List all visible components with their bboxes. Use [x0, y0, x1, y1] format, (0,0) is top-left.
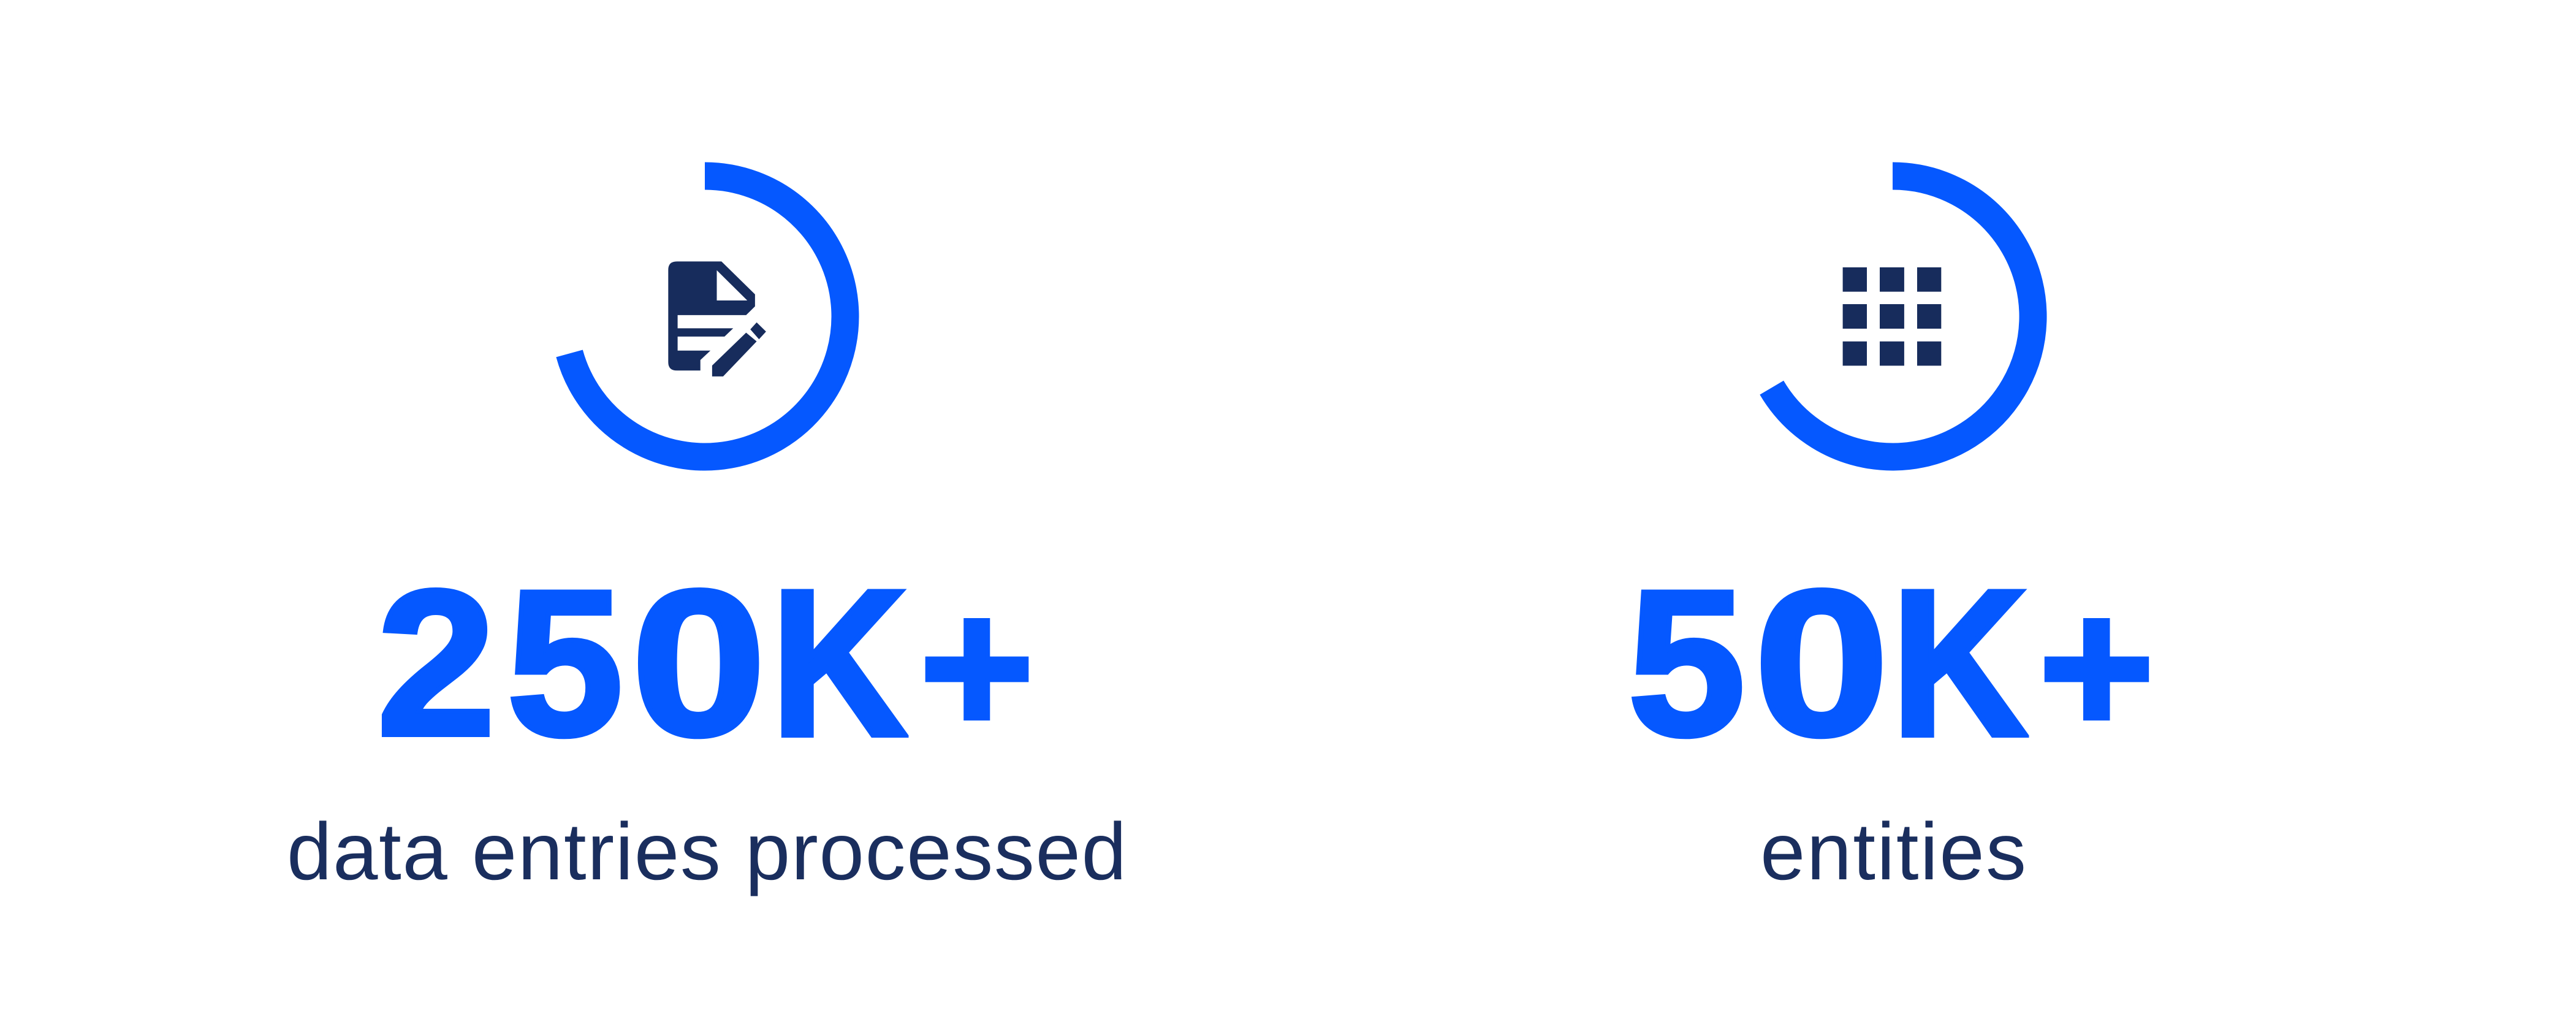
stat value: 50K+: +: [2038, 559, 2154, 774]
icon: grid of squares: [1843, 267, 1941, 365]
stat value: 250K+: [377, 547, 1035, 779]
panel: data entries statistic: [287, 162, 1127, 896]
stat value: 250K+: 5: [507, 547, 623, 779]
progress ring: data entries: [569, 176, 845, 457]
stat value: 250K+: K: [772, 547, 906, 779]
progress ring: entities: [1772, 176, 2033, 457]
stat value: 50K+: [1628, 547, 2154, 779]
panel: entities statistic: [1628, 162, 2154, 896]
stat value: 50K+: 5: [1628, 547, 1746, 779]
stat value: 250K+: +: [919, 559, 1035, 774]
stat label: data entries processed: data entries processed: [287, 806, 1127, 896]
icon: document with pencil: [668, 261, 766, 376]
stat value: 50K+: K: [1892, 547, 2027, 779]
ring, icon and label artwork: [287, 162, 1127, 896]
stat label: entities: entities: [1760, 806, 2026, 896]
stat value: 50K+: 0: [1754, 547, 1889, 779]
ring, icon and label artwork: [1760, 162, 2047, 896]
stat value: 250K+: 0: [631, 547, 766, 779]
stat value: 250K+: 2: [377, 547, 496, 779]
